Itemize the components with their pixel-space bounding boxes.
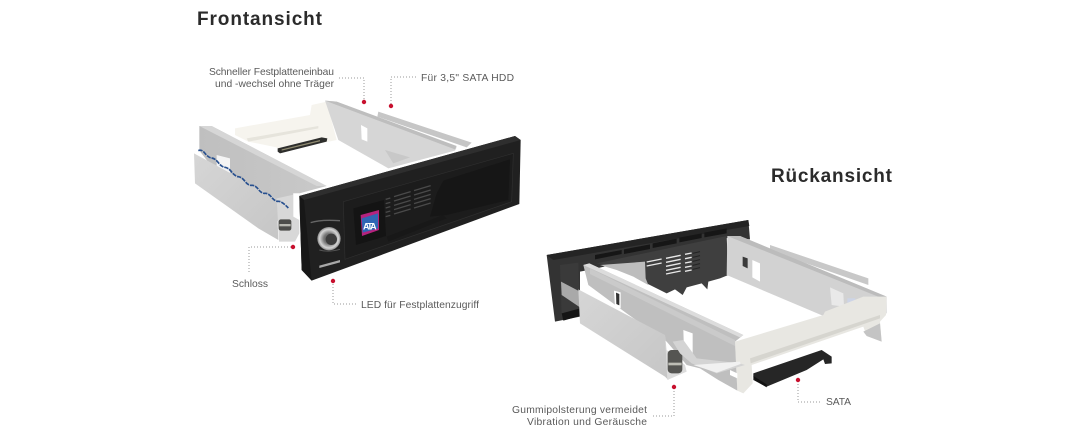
callout: Schloss: Schloss — [232, 279, 268, 290]
product: rear view of drive bay — [547, 220, 887, 393]
SATA logo badge: ATA — [363, 221, 377, 231]
curved silver sheet — [600, 262, 648, 285]
SATA connector — [278, 137, 327, 153]
callout: Schloss — [232, 245, 295, 290]
far inner rail — [377, 112, 472, 147]
callout: LED für Festplattenzugriff — [331, 279, 479, 311]
SATA logo badge — [361, 210, 379, 236]
callout: Schneller Festplatteneinbau: Schneller Festplatteneinbau — [209, 67, 334, 78]
callout: Für 3,5" SATA HDD — [389, 73, 514, 108]
rear side plate — [578, 289, 668, 380]
metal bracket — [561, 282, 580, 307]
lock key — [311, 220, 341, 251]
front black panel — [299, 136, 521, 281]
far rail — [325, 101, 457, 168]
inner tray back wall — [597, 236, 728, 295]
far rail wall — [727, 236, 887, 317]
lever — [673, 340, 745, 373]
far outer rail — [770, 245, 868, 285]
callout: Für 3,5" SATA HDD: Für 3,5" SATA HDD — [421, 73, 514, 84]
heading: Rückansicht: Rückansicht — [771, 166, 893, 187]
rubber damper rear — [668, 350, 682, 373]
logo recess — [353, 200, 386, 245]
callout: Gummipolsterung: Gummipolsterung vermeidet — [512, 405, 647, 416]
blue twisted cable — [198, 150, 288, 208]
callout: Schneller Festplatteneinbau: und -wechsel ohne Träger — [215, 79, 335, 90]
rubber damper — [279, 219, 291, 231]
heading: Frontansicht: Frontansicht — [197, 9, 323, 30]
product: front view of drive bay — [194, 101, 521, 281]
vents — [386, 186, 431, 217]
handle recess — [430, 159, 510, 217]
callout: Schneller Festplatteneinbau — [209, 67, 366, 104]
callout: SATA: SATA — [826, 397, 851, 408]
rear white crossbar — [735, 297, 887, 393]
slots in frame — [595, 228, 727, 259]
callout: SATA — [796, 378, 851, 408]
callout: Gummipolsterung — [512, 385, 676, 428]
near rail wall — [583, 263, 743, 391]
white tray crossbar — [235, 102, 337, 152]
callout: LED für Festplattenzugriff: LED für Festplattenzugriff — [361, 300, 479, 311]
callout: Gummipolsterung: Vibration und Geräusche — [527, 417, 647, 428]
black front frame — [547, 220, 750, 322]
recessed tray area — [343, 153, 513, 259]
SATA connector rear — [753, 350, 832, 387]
white vents — [647, 253, 692, 274]
LED strip — [319, 260, 340, 268]
white bracket end — [277, 193, 299, 242]
near upper rail — [199, 126, 327, 227]
near side plate — [194, 153, 278, 240]
